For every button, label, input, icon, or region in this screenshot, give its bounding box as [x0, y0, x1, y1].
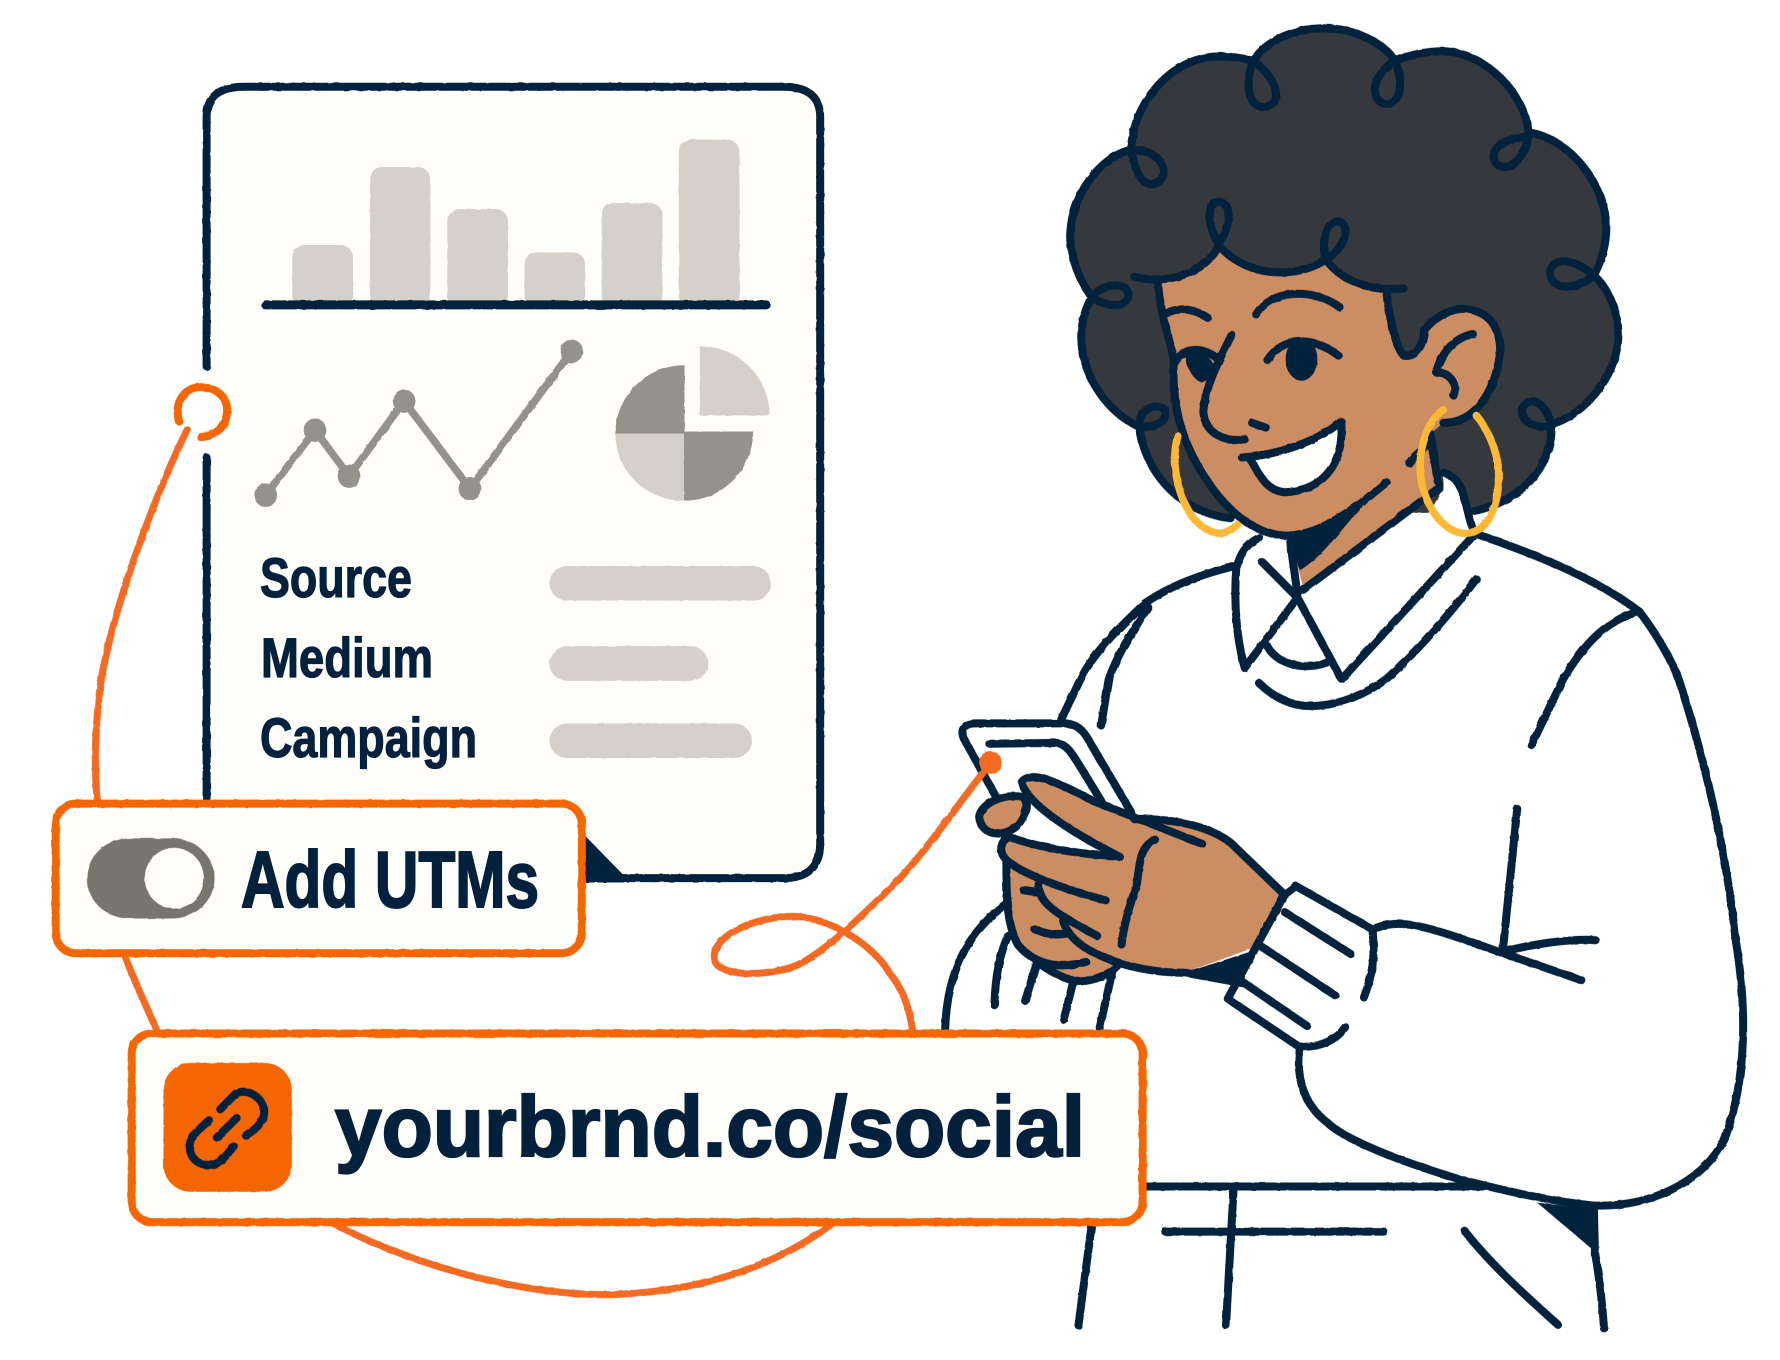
- hand: [979, 777, 1284, 987]
- orange connector line: [95, 429, 1002, 1295]
- label: Source: Source: [260, 546, 412, 609]
- label: Medium: Medium: [261, 626, 433, 689]
- sweater and collar: [945, 473, 1743, 1328]
- icon: orange loop marker: [178, 387, 227, 437]
- panel: short link label: [132, 1033, 1143, 1222]
- face and neck: [1134, 202, 1500, 594]
- icon: link: [163, 1063, 292, 1192]
- person illustration: [945, 28, 1743, 1328]
- placeholder value bars: [549, 566, 771, 758]
- earrings: [1175, 410, 1499, 533]
- phone: [962, 723, 1131, 812]
- toggle switch: [87, 838, 215, 919]
- panel: add UTMs toggle label: [56, 804, 582, 953]
- bar chart: [266, 140, 766, 308]
- page fold corner: [585, 835, 624, 883]
- shirt cuff: [1228, 886, 1372, 1047]
- thumb: [979, 796, 1026, 833]
- label: Campaign: Campaign: [260, 706, 477, 769]
- panel: analytics report card: [207, 87, 820, 883]
- hair: [1070, 28, 1618, 518]
- line chart: [254, 340, 583, 507]
- pie chart: [615, 346, 770, 501]
- heading: Add UTMs: Add UTMs: [241, 835, 539, 924]
- heading: short link URL: yourbrnd.co/social: [335, 1080, 1085, 1175]
